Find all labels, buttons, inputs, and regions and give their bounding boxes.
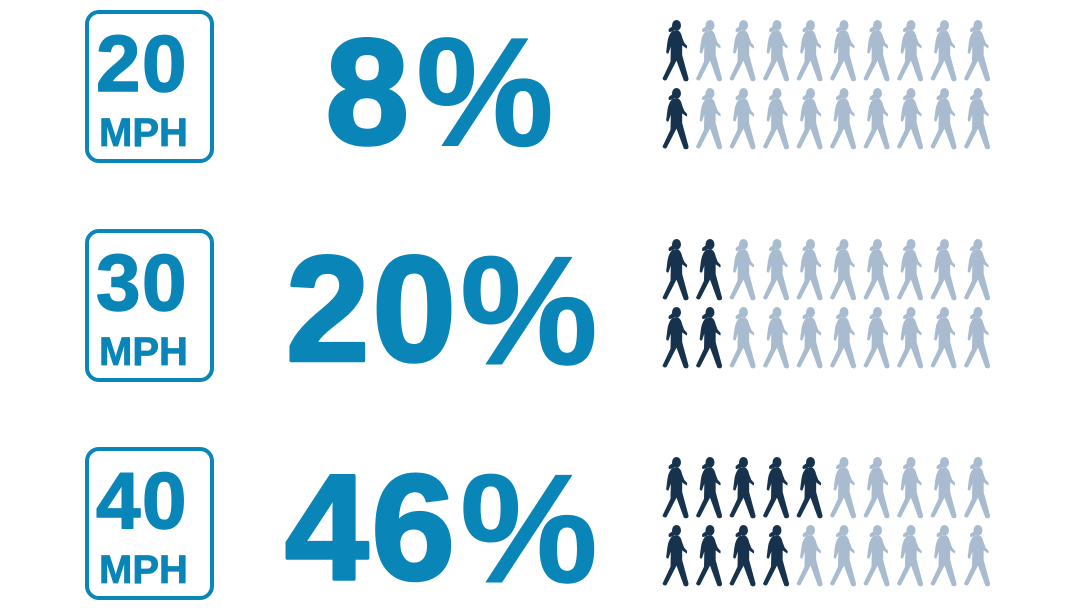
row: 30 mph [87,224,990,397]
speed sign: 30 MPH: MPH [99,330,188,374]
speed sign: 30 MPH: 30 [96,238,188,327]
percentage: 20%: 20 [286,224,459,392]
percentage: 20%: % [460,224,598,397]
speed sign: 40 MPH: 40 [96,456,188,545]
pictogram: 4 of 20 pedestrians dark [662,239,990,368]
percentage: 8%: 8 [326,8,412,176]
speed sign: 30 MPH [87,231,212,380]
row: 20 mph [87,6,990,178]
pictogram: 2 of 20 pedestrians dark [662,20,990,149]
row: 40 mph [87,442,990,608]
speed sign: 20 MPH: 20 [96,19,188,108]
percentage: 46%: 46 [285,443,458,608]
percentage: 8%: % [416,6,554,178]
speed sign: 20 MPH: MPH [99,111,188,155]
speed sign: 40 MPH: MPH [99,548,188,592]
speed sign: 20 MPH [87,12,212,161]
speed sign: 40 MPH [87,449,212,598]
pictogram: 9 of 20 pedestrians dark [662,457,990,586]
